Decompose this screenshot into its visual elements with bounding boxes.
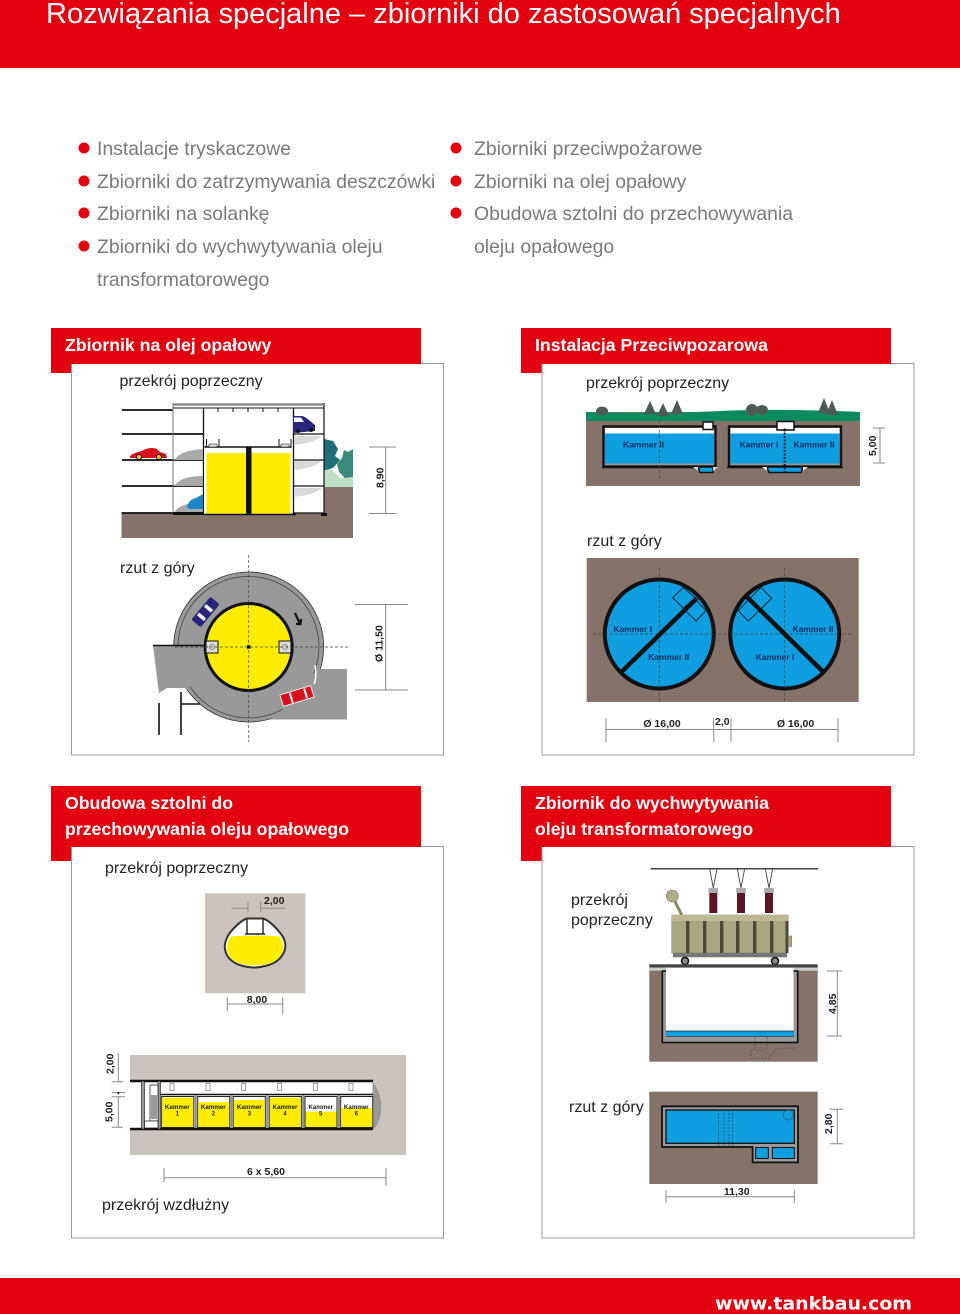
- bullet list: right column: Zbiorniki na olej opałowy: [474, 171, 687, 193]
- panel: heating oil tank: [51, 328, 444, 755]
- heading: fire protection installation: [521, 328, 891, 373]
- right round tank: [730, 580, 839, 688]
- panel: fire protection installation: [521, 328, 914, 755]
- navy car: [293, 416, 315, 433]
- heading: fire protection installation: Instalacja Przeciwpozarowa: [535, 335, 768, 355]
- red car: [130, 448, 167, 458]
- chamber 4: [269, 1096, 301, 1128]
- heading: transformer oil catch tank: oleju transformatorowego: [535, 819, 753, 839]
- left round tank: Kammer II: [648, 652, 689, 662]
- label: cross-section: przekrój: [571, 892, 628, 909]
- chamber 2: [198, 1096, 230, 1128]
- chamber 2: 2: [212, 1110, 216, 1118]
- tank: [204, 439, 296, 515]
- heading: tunnel housing: przechowywania oleju opałowego: [65, 819, 349, 839]
- blue car: [187, 494, 203, 509]
- right tank: Kammer I: [740, 440, 778, 450]
- top view drawing: circular ramp and tank: [153, 555, 350, 742]
- chamber 1: 1: [176, 1110, 180, 1118]
- longitudinal section drawing: six chambers: [130, 1055, 406, 1155]
- cross-section drawing: underground tanks: [586, 398, 860, 486]
- dimensions: 16,00 / 2,0 / 16,00: 2,0: [715, 716, 730, 728]
- bullet list: right column: oleju opałowego: [474, 236, 614, 258]
- chamber 1: [162, 1096, 194, 1128]
- dimension: 2,00: 2,00: [264, 895, 285, 907]
- chamber 4: Kammer: [273, 1104, 298, 1111]
- label: top view: rzut z góry: [120, 560, 195, 577]
- tunnel cross-section drawing: [205, 893, 305, 993]
- heading: heating oil tank: [51, 328, 421, 373]
- chamber 6: 6: [355, 1110, 359, 1118]
- red car top view: [280, 686, 314, 706]
- label: cross-section: przekrój poprzeczny: [105, 860, 248, 877]
- panel: tunnel housing for heating oil: [51, 786, 444, 1238]
- chamber 5: Kammer: [308, 1104, 334, 1111]
- bullet list: left column: [78, 138, 435, 291]
- dimensions: 16,00 / 2,0 / 16,00: [606, 716, 838, 742]
- dimension: 5,00: [867, 428, 885, 463]
- right tank: Kammer II: [793, 440, 835, 450]
- dimension: 8,90: 8,90: [374, 467, 386, 488]
- dimension: 11,30: 11,30: [724, 1186, 750, 1198]
- chamber 4: 4: [283, 1110, 287, 1118]
- label: top view: rzut z góry: [569, 1099, 644, 1116]
- bullet list: right column: Obudowa sztolni do przechowywania: [474, 203, 793, 225]
- heading: transformer oil catch tank: Zbiornik do wychwytywania: [535, 793, 769, 813]
- dimension: diameter 11,50: Ø 11,50: [374, 625, 386, 662]
- dimension: 5,00 vertical: [104, 1092, 125, 1127]
- heading: transformer oil catch tank: [521, 786, 891, 861]
- label: cross-section: poprzeczny: [571, 912, 653, 929]
- chamber 1: Kammer: [165, 1104, 190, 1111]
- dimension: 11,30: [666, 1186, 794, 1203]
- dimension: 2,00 vertical: 2,00: [104, 1053, 116, 1074]
- heading: tunnel housing: [51, 786, 421, 861]
- label: cross-section: przekrój poprzeczny: [586, 375, 729, 392]
- right tank: [727, 422, 843, 472]
- dimension: 4,85: [827, 971, 842, 1036]
- catch pit top view: [649, 1092, 818, 1184]
- dimension: 6 x 5,60: 6 x 5,60: [247, 1166, 285, 1178]
- bullet list: left column: transformatorowego: [97, 269, 269, 291]
- right round tank: Kammer II: [792, 624, 834, 634]
- bullet list: left column: Instalacje tryskaczowe: [97, 138, 291, 160]
- bullet list: left column: Zbiorniki na solankę: [97, 203, 269, 225]
- ceiling hatches: [170, 1083, 353, 1091]
- panel: transformer oil catch tank: [521, 786, 914, 1238]
- left round tank: Kammer I: [613, 624, 652, 634]
- chamber 3: Kammer: [237, 1104, 262, 1111]
- dimension: 8,00: [227, 994, 283, 1014]
- right round tank: Kammer I: [756, 652, 794, 662]
- chamber 5: 5: [319, 1110, 323, 1118]
- chamber 3: 3: [248, 1110, 252, 1118]
- dimension: 2,00 vertical: [104, 1053, 123, 1082]
- dimension: 2,80: [823, 1109, 843, 1144]
- bullet list: left column: Zbiorniki do zatrzymywania deszczówki: [97, 171, 435, 193]
- left round tank: [605, 580, 714, 688]
- footer band: [0, 1278, 960, 1314]
- label: cross-section: przekrój poprzeczny: [120, 373, 263, 390]
- bullet list: right column: Zbiorniki przeciwpożarowe: [474, 138, 702, 160]
- dimension: 4,85: 4,85: [827, 993, 839, 1014]
- dimension: 2,00: [232, 895, 285, 912]
- chamber 5: [305, 1096, 337, 1128]
- arrow: driving direction: [295, 613, 301, 624]
- dimension: 5,00 vertical: 5,00: [104, 1101, 116, 1122]
- heading: heating oil tank: Zbiornik na olej opałowy: [65, 335, 272, 355]
- bullet list: left column: Zbiorniki do wychwytywania oleju: [97, 236, 383, 258]
- header band: [0, 0, 960, 68]
- dimension: 8,90: [369, 447, 396, 514]
- trees and bushes: [596, 398, 838, 416]
- transformer drawing: [651, 869, 818, 964]
- cross-section drawing: car park and tank: [122, 403, 353, 538]
- label: top view: rzut z góry: [587, 533, 662, 550]
- heading: tunnel housing: Obudowa sztolni do: [65, 793, 233, 813]
- catch pit cross-section: [649, 964, 818, 1062]
- dimension: 6 x 5,60: [164, 1166, 386, 1186]
- chamber 2: Kammer: [201, 1104, 226, 1111]
- dimensions: 16,00 / 2,0 / 16,00: Ø 16,00: [643, 718, 681, 730]
- bullet list: right column: [450, 138, 793, 258]
- left tank: [602, 420, 718, 480]
- top view drawing: two round tanks: [587, 558, 859, 702]
- left tank: Kammer II: [623, 440, 664, 450]
- website address: www.tankbau.com: [715, 1294, 912, 1314]
- navy car top view: [191, 597, 220, 627]
- chamber 3: [233, 1096, 265, 1128]
- dimension: 2,80: 2,80: [823, 1113, 835, 1134]
- dimension: diameter 11,50: [355, 604, 408, 690]
- dimension: 8,00: 8,00: [247, 994, 267, 1006]
- dimension: 5,00: 5,00: [867, 435, 879, 456]
- dimensions: 16,00 / 2,0 / 16,00: Ø 16,00: [777, 718, 814, 730]
- chamber 6: Kammer: [344, 1104, 369, 1111]
- chamber 6: [341, 1096, 373, 1128]
- label: longitudinal section: przekrój wzdłużny: [102, 1197, 229, 1214]
